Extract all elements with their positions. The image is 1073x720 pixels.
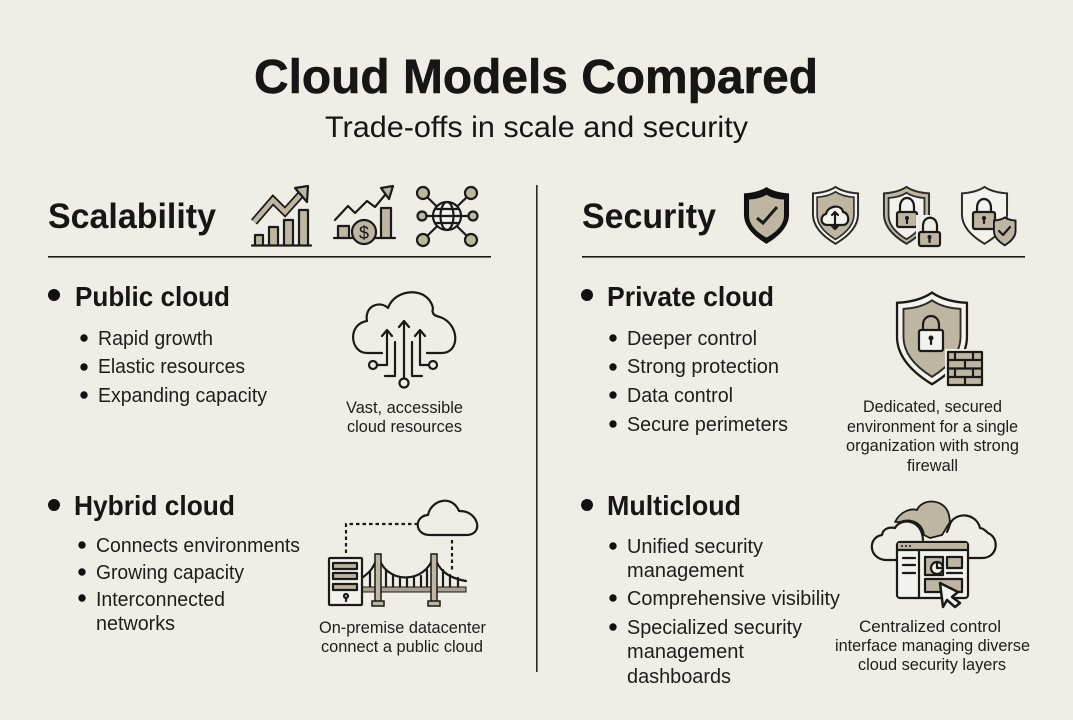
list: hybrid cloud points: Growing capacity (96, 562, 244, 584)
heading: public cloud: Public cloud (75, 281, 230, 312)
list: hybrid cloud points (78, 535, 300, 635)
caption: private cloud: organization with strong (846, 436, 1019, 455)
title: Cloud Models Compared (254, 51, 818, 104)
panel: scalability (48, 186, 478, 246)
list: hybrid cloud points: Connects environments (96, 535, 300, 557)
list: public cloud points: Elastic resources (98, 356, 245, 378)
panel: public cloud (48, 281, 463, 436)
caption: private cloud: Dedicated, secured (863, 397, 1002, 416)
icon: revenue growth (334, 186, 395, 244)
caption: hybrid cloud: connect a public cloud (321, 637, 483, 656)
caption: hybrid cloud (319, 618, 486, 656)
panel: hybrid cloud (48, 490, 486, 656)
heading: scalability: Scalability (48, 197, 217, 236)
caption: multicloud (835, 617, 1030, 674)
heading: multicloud: Multicloud (607, 490, 741, 521)
panel: security (582, 187, 1016, 247)
list: public cloud points (80, 328, 267, 407)
caption: private cloud: environment for a single (847, 417, 1018, 436)
panel: private cloud (581, 281, 1019, 475)
icon: revenue growth: $ (359, 223, 369, 243)
icon: shield with lock and badge (962, 187, 1016, 245)
list: private cloud points: Data control (627, 385, 733, 407)
list: private cloud points: Secure perimeters (627, 414, 788, 436)
panel: multicloud (581, 490, 1030, 688)
icon: shield with cloud (813, 187, 858, 244)
icon: datacenter bridged to cloud (329, 501, 477, 606)
heading: hybrid cloud: Hybrid cloud (74, 490, 235, 521)
caption: multicloud: Centralized control (859, 617, 1001, 636)
icon: shield with lock and firewall (897, 293, 985, 387)
caption: public cloud: Vast, accessible (346, 398, 463, 417)
list: multicloud points: Comprehensive visibility (627, 588, 840, 610)
list: multicloud points: Unified security (627, 536, 763, 558)
caption: hybrid cloud: On-premise datacenter (319, 618, 486, 637)
icon: shield with two locks (884, 187, 943, 247)
heading: private cloud: Private cloud (607, 281, 774, 312)
list: public cloud points: Rapid growth (98, 328, 213, 350)
caption: multicloud: interface managing diverse (835, 636, 1030, 655)
caption: private cloud (846, 397, 1019, 475)
icon: growth bars with arrow (252, 186, 311, 246)
subtitle: Trade-offs in scale and security (325, 111, 748, 144)
list: private cloud points: Deeper control (627, 328, 757, 350)
heading: security: Security (582, 197, 717, 236)
list: private cloud points: Strong protection (627, 356, 779, 378)
icon: shield with check (744, 187, 789, 244)
icon: cloud with upward arrows (353, 292, 455, 388)
icon: cloud dashboard with cursor (872, 502, 996, 607)
list: multicloud points: management (627, 641, 744, 663)
caption: public cloud: cloud resources (347, 417, 462, 436)
list: multicloud points: Specialized security (627, 617, 802, 639)
caption: public cloud (346, 398, 463, 436)
list: hybrid cloud points: Interconnected (96, 589, 225, 611)
list: hybrid cloud points: networks (96, 613, 175, 635)
caption: private cloud: firewall (907, 456, 958, 475)
caption: multicloud: cloud security layers (858, 655, 1006, 674)
list: multicloud points: dashboards (627, 666, 731, 688)
icon: globe network (417, 187, 478, 246)
list: public cloud points: Expanding capacity (98, 385, 267, 407)
list: multicloud points: management (627, 560, 744, 582)
list: private cloud points (609, 328, 788, 436)
list: multicloud points (609, 536, 840, 688)
